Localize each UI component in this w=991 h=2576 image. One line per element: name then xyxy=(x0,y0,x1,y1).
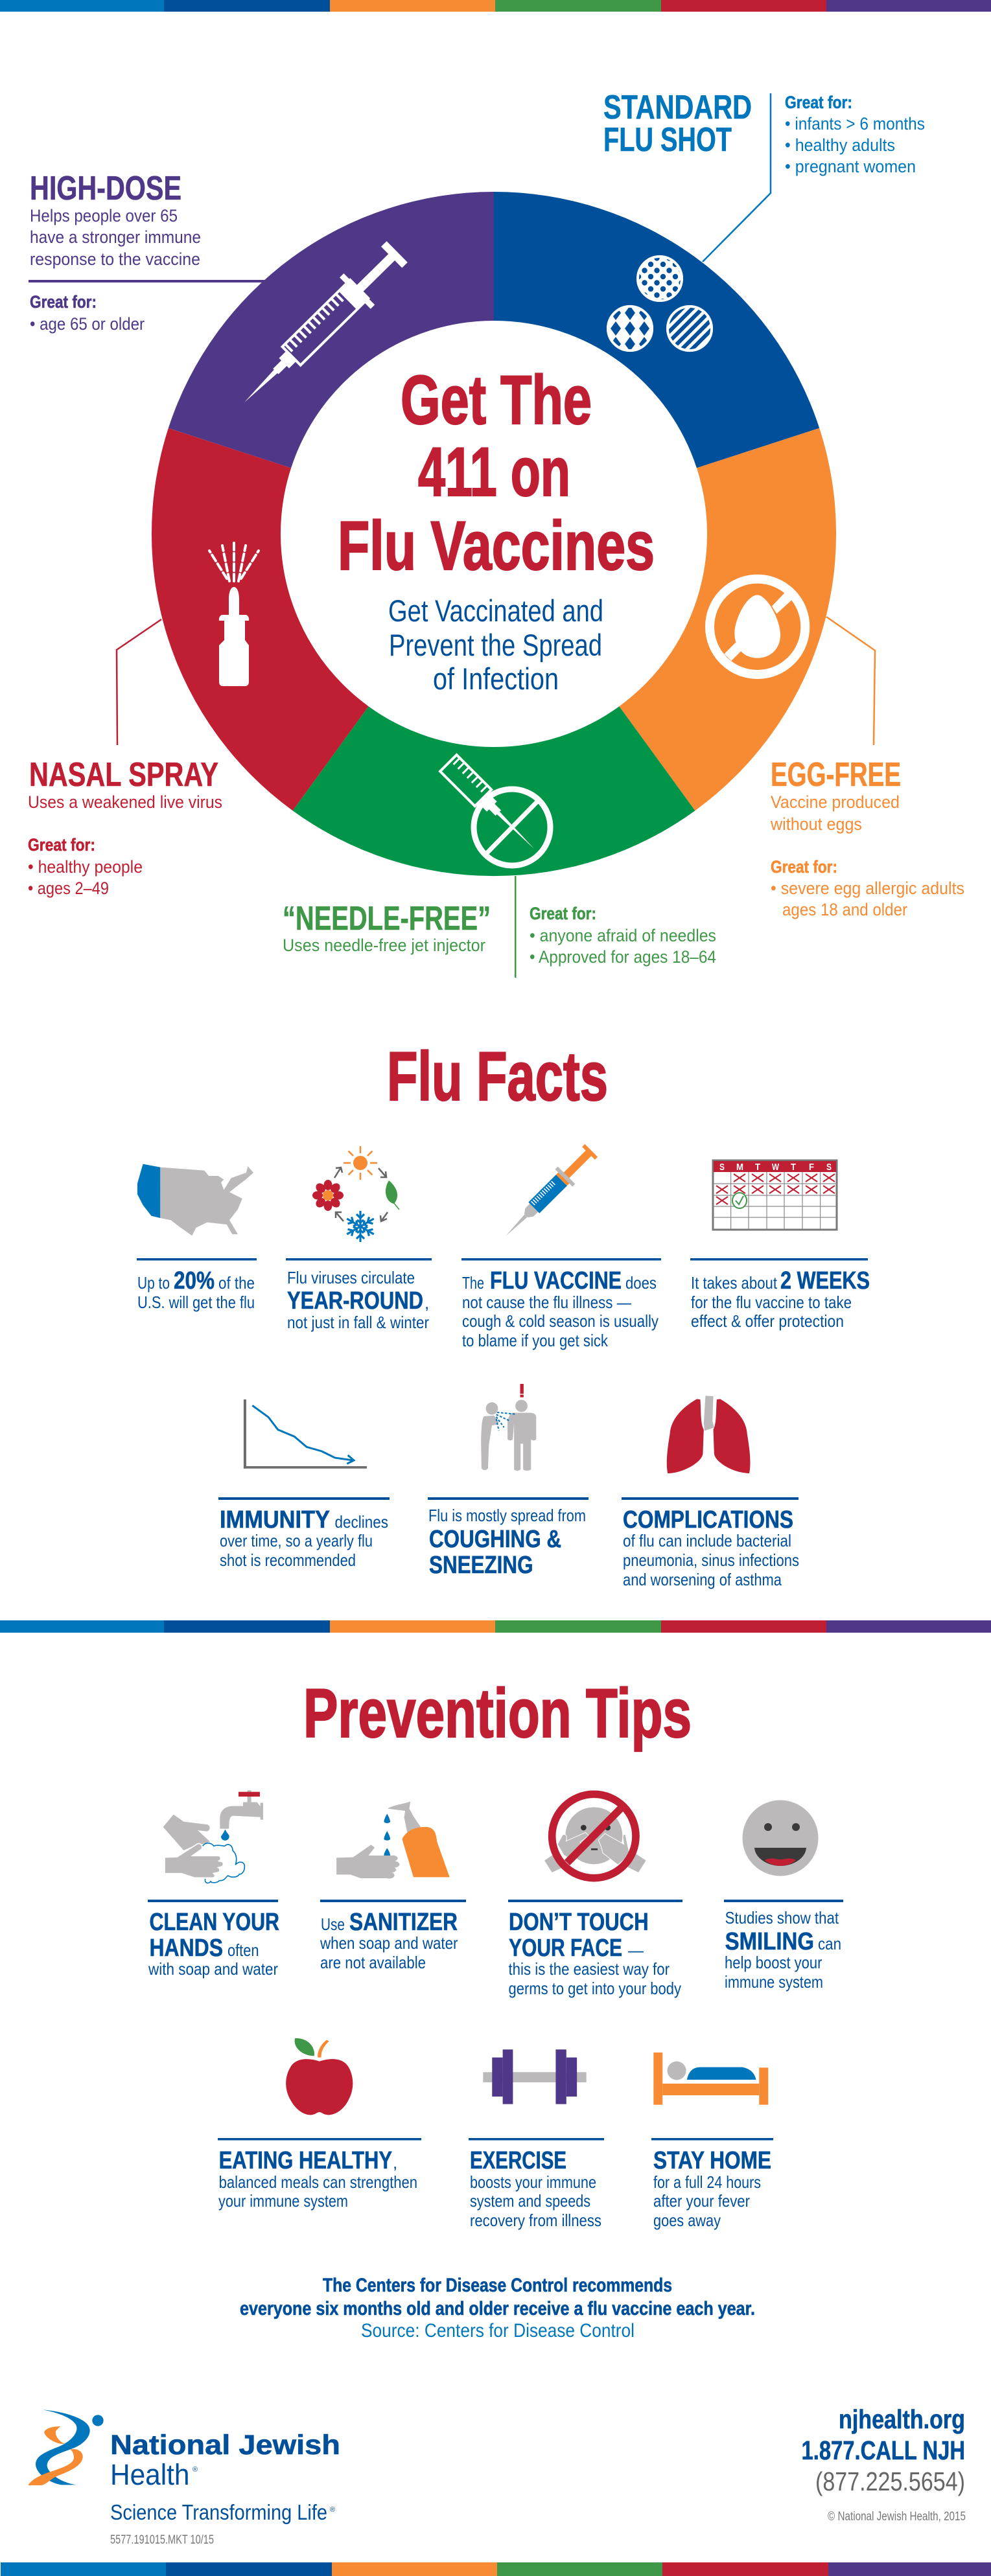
callout: egg-free: Vaccine produced xyxy=(771,792,900,812)
fact: 2 weeks: 2 WEEKS xyxy=(780,1267,870,1294)
icon: calendar: S xyxy=(826,1162,832,1173)
callout: needle-free: • Approved for ages 18–64 xyxy=(530,947,716,967)
fact: coughing and sneezing xyxy=(428,1497,589,1579)
tip: eating healthy xyxy=(218,2138,421,2211)
tip: eating healthy: balanced meals can strengthen xyxy=(219,2172,417,2192)
tip: exercise: system and speeds xyxy=(470,2191,590,2211)
tip: smiling: Studies show that xyxy=(725,1908,839,1927)
callout: needle-free xyxy=(283,876,716,978)
icon: egg crossed out xyxy=(710,579,805,674)
tip: smiling: help boost your xyxy=(725,1953,822,1972)
tip: exercise: EXERCISE xyxy=(470,2147,566,2174)
tip: clean your hands xyxy=(148,1900,279,1979)
center title: Get The xyxy=(401,361,592,439)
callout: needle-free: “NEEDLE-FREE” xyxy=(283,900,491,937)
callout: standard flu shot: STANDARD xyxy=(603,89,752,126)
center subtitle: Get Vaccinated and xyxy=(388,593,603,628)
tip: smiling: immune system xyxy=(725,1972,823,1992)
icon: three patterned vaccine circles xyxy=(607,255,713,352)
tip: don't touch your face: — xyxy=(628,1940,644,1960)
callout: egg-free xyxy=(770,617,964,919)
icon: smiling face xyxy=(743,1800,818,1876)
fact: immunity: declines xyxy=(334,1512,388,1532)
fact: flu vaccine: cough & cold season is usually xyxy=(462,1311,659,1331)
contact details xyxy=(801,2404,966,2524)
icon: calendar: W xyxy=(772,1162,780,1173)
icon: dumbbell xyxy=(483,2049,587,2104)
fact: 20 percent: Up to xyxy=(137,1273,170,1293)
center title xyxy=(338,361,655,584)
fact: complications xyxy=(622,1497,799,1589)
callout: standard flu shot: • healthy adults xyxy=(785,135,895,155)
callout: high-dose: Helps people over 65 xyxy=(30,206,178,225)
tip: use sanitizer xyxy=(320,1900,466,1972)
callout: needle-free: Uses needle-free jet injector xyxy=(283,936,485,955)
callout: high-dose: have a stronger immune xyxy=(30,227,201,247)
icon: calendar: T xyxy=(791,1162,796,1173)
callout: egg-free: EGG-FREE xyxy=(771,756,901,794)
icon: calendar: F xyxy=(809,1162,814,1173)
fact: 2 weeks xyxy=(690,1258,870,1331)
center subtitle: Prevent the Spread xyxy=(389,628,602,662)
icon: apple xyxy=(286,2038,353,2115)
callout: high-dose: HIGH-DOSE xyxy=(30,170,181,207)
callout: nasal spray: • healthy people xyxy=(28,857,143,877)
segment: egg-free xyxy=(619,428,836,811)
callout: standard flu shot: FLU SHOT xyxy=(603,121,732,159)
tip: stay home: goes away xyxy=(653,2211,721,2230)
icon: bed xyxy=(653,2053,768,2105)
tip: use sanitizer: Use xyxy=(321,1915,345,1934)
contact details: (877.225.5654) xyxy=(815,2467,965,2496)
fact: year-round: , xyxy=(425,1293,429,1313)
tip: stay home: after your fever xyxy=(653,2191,750,2211)
top colour bar xyxy=(0,0,991,12)
fact: complications: and worsening of asthma xyxy=(623,1570,782,1589)
icon: calendar: S xyxy=(719,1162,725,1173)
callout: standard flu shot: • pregnant women xyxy=(785,157,916,176)
fact: 20 percent: of the xyxy=(218,1273,255,1293)
icon: hand washing xyxy=(163,1790,263,1883)
tip: smiling: SMILING xyxy=(725,1928,814,1955)
CDC recommendation: The Centers for Disease Control recommends xyxy=(323,2275,672,2296)
tip: clean your hands: often xyxy=(227,1940,259,1960)
icon: US map xyxy=(137,1164,253,1236)
tip: don't touch your face: DON’T TOUCH xyxy=(509,1909,649,1936)
heading: Flu Facts: Flu Facts xyxy=(387,1037,608,1115)
segment: needle-free xyxy=(293,706,695,876)
icon: calendar xyxy=(713,1160,837,1230)
middle colour bar xyxy=(0,1620,991,1633)
tip: stay home: STAY HOME xyxy=(653,2147,771,2174)
callout: high-dose: • age 65 or older xyxy=(30,314,145,334)
tip: eating healthy: your immune system xyxy=(218,2191,348,2211)
tip: eating healthy: , xyxy=(393,2153,397,2172)
tip: stay home: for a full 24 hours xyxy=(653,2172,761,2192)
callout: egg-free: Great for: xyxy=(771,857,837,877)
segment: nasal spray xyxy=(152,428,369,811)
fact: year-round: Flu viruses circulate xyxy=(287,1268,415,1287)
tip: smiling xyxy=(724,1900,843,1992)
fact: coughing and sneezing: SNEEZING xyxy=(429,1552,533,1579)
callout: nasal spray: Great for: xyxy=(28,835,95,855)
tip: eating healthy: EATING HEALTHY xyxy=(219,2147,392,2174)
tip: exercise: boosts your immune xyxy=(470,2172,596,2192)
callout: nasal spray: Uses a weakened live virus xyxy=(28,792,222,812)
callout: needle-free: Great for: xyxy=(530,904,596,923)
icon: calendar: T xyxy=(755,1162,760,1173)
logo: National Jewish Health: Health xyxy=(110,2458,189,2491)
callout: nasal spray: NASAL SPRAY xyxy=(29,756,218,794)
callout: high-dose: Great for: xyxy=(30,292,97,312)
icon: flu vaccine syringe xyxy=(497,1142,600,1245)
fact: complications: COMPLICATIONS xyxy=(623,1506,793,1534)
tip: exercise xyxy=(469,2138,604,2230)
callout: high-dose: response to the vaccine xyxy=(30,249,200,269)
logo: National Jewish Health xyxy=(28,2409,340,2524)
bottom colour bar xyxy=(1,2562,991,2576)
tip: stay home xyxy=(651,2138,773,2230)
tip: don't touch your face xyxy=(508,1900,682,1998)
center subtitle: of Infection xyxy=(433,661,559,696)
fact: flu vaccine: does xyxy=(625,1273,657,1293)
callout: nasal spray xyxy=(28,619,222,898)
tip: clean your hands: with soap and water xyxy=(148,1959,278,1979)
logo: National Jewish Health: Science Transforming Life xyxy=(110,2500,327,2524)
icon: nasal spray bottle xyxy=(209,543,259,686)
icon: lungs xyxy=(667,1396,750,1473)
fact: year-round: not just in fall & winter xyxy=(287,1313,429,1332)
fact: complications: pneumonia, sinus infections xyxy=(623,1550,799,1570)
tip: use sanitizer: are not available xyxy=(320,1953,426,1972)
callout: egg-free: ages 18 and older xyxy=(782,900,907,919)
tip: smiling: can xyxy=(818,1934,841,1953)
icon: calendar: M xyxy=(736,1162,743,1173)
tip: exercise: recovery from illness xyxy=(470,2211,601,2230)
fact: immunity: over time, so a yearly flu xyxy=(220,1531,373,1550)
logo: National Jewish Health: ® xyxy=(192,2466,198,2474)
callout: needle-free: • anyone afraid of needles xyxy=(530,926,716,945)
donut chart: five vaccine types xyxy=(152,192,836,876)
fact: immunity: shot is recommended xyxy=(220,1550,356,1570)
job code: 5577.191015.MKT 10/15 xyxy=(110,2533,214,2547)
fact: coughing and sneezing: Flu is mostly spread from xyxy=(428,1506,586,1525)
fact: 2 weeks: It takes about xyxy=(691,1273,778,1293)
icon: DNA helix xyxy=(28,2409,104,2485)
fact: 20 percent xyxy=(137,1258,257,1312)
tip: use sanitizer: SANITIZER xyxy=(349,1909,458,1936)
tip: clean your hands: CLEAN YOUR xyxy=(149,1909,279,1936)
CDC recommendation xyxy=(240,2275,755,2341)
fact: flu vaccine: to blame if you get sick xyxy=(462,1331,609,1350)
center title: 411 on xyxy=(418,433,570,511)
fact: year-round: YEAR-ROUND xyxy=(287,1287,423,1315)
heading: Prevention Tips: Prevention Tips xyxy=(303,1674,692,1752)
callout: egg-free: without eggs xyxy=(770,814,862,834)
icon: high-dose syringe xyxy=(229,236,413,418)
fact: flu vaccine: not cause the flu illness — xyxy=(462,1293,631,1312)
tip: don't touch your face: YOUR FACE xyxy=(509,1935,622,1962)
center subtitle xyxy=(388,593,603,696)
fact: flu vaccine: The xyxy=(462,1273,484,1293)
fact: coughing and sneezing: COUGHING & xyxy=(429,1526,561,1553)
icon: seasons cycle xyxy=(312,1146,399,1242)
tip: use sanitizer: when soap and water xyxy=(320,1933,458,1953)
icon: hand sanitizer xyxy=(336,1802,450,1879)
fact: 2 weeks: effect & offer protection xyxy=(691,1311,844,1331)
segment: standard flu shot xyxy=(494,192,819,468)
fact: immunity: IMMUNITY xyxy=(220,1506,330,1534)
fact: flu vaccine xyxy=(461,1258,661,1350)
fact: year-round xyxy=(286,1258,432,1332)
CDC recommendation: everyone six months old and older receive a flu vaccine each year. xyxy=(240,2298,755,2319)
icon: do not touch face xyxy=(544,1794,646,1878)
fact: flu vaccine: FLU VACCINE xyxy=(490,1267,622,1294)
fact: 20 percent: 20% xyxy=(174,1267,215,1294)
center title: Flu Vaccines xyxy=(338,507,655,584)
icon: coughing people xyxy=(481,1384,536,1471)
CDC recommendation: Source: Centers for Disease Control xyxy=(361,2320,635,2341)
callout: standard flu shot: • infants > 6 months xyxy=(785,114,925,133)
fact: immunity xyxy=(218,1497,390,1570)
callout: standard flu shot xyxy=(603,89,925,262)
fact: 20 percent: U.S. will get the flu xyxy=(137,1293,255,1312)
callout: nasal spray: • ages 2–49 xyxy=(28,879,109,898)
logo: National Jewish Health: National Jewish xyxy=(110,2430,340,2461)
segment: high-dose xyxy=(169,192,494,468)
tip: don't touch your face: this is the easiest way for xyxy=(508,1959,670,1979)
logo: National Jewish Health: ® xyxy=(330,2506,335,2514)
tip: don't touch your face: germs to get into your body xyxy=(508,1979,681,1998)
callout: egg-free: • severe egg allergic adults xyxy=(771,879,964,898)
fact: complications: of flu can include bacterial xyxy=(623,1531,791,1550)
icon: needle crossed out xyxy=(440,755,550,866)
tip: clean your hands: HANDS xyxy=(149,1935,223,1962)
callout: high-dose xyxy=(29,170,264,334)
fact: 2 weeks: for the flu vaccine to take xyxy=(691,1293,852,1312)
icon: immunity decline chart xyxy=(244,1399,367,1469)
contact details: njhealth.org xyxy=(839,2404,965,2434)
callout: standard flu shot: Great for: xyxy=(785,93,852,112)
